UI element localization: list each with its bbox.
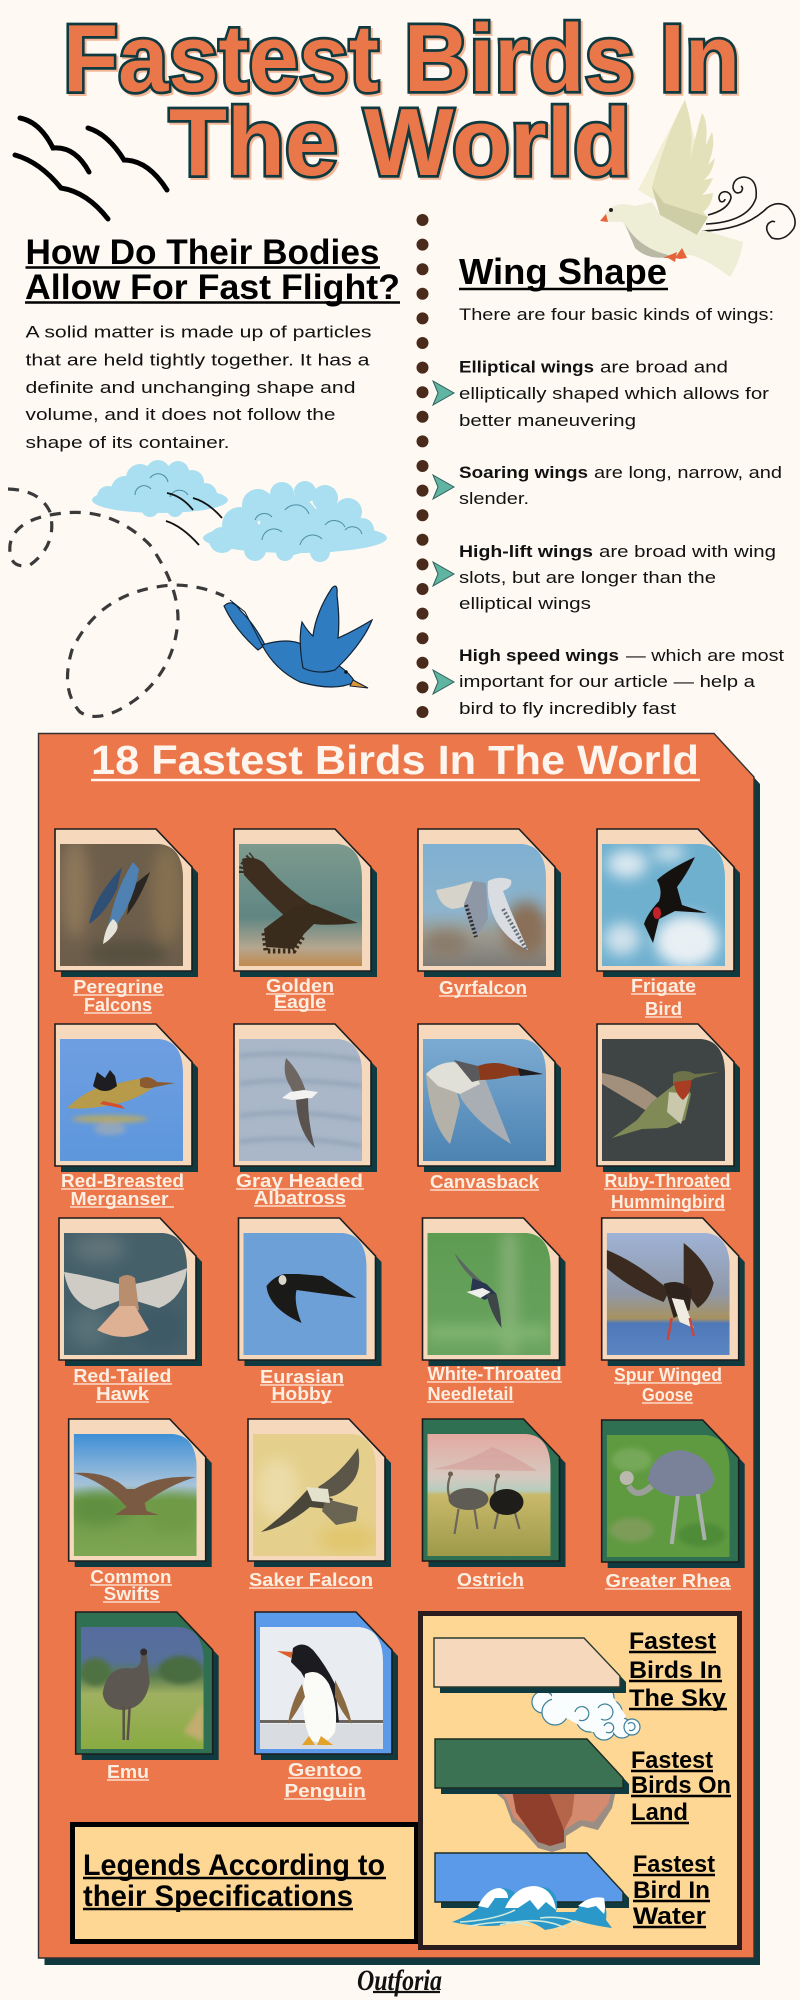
heading: how do their bodies — [25, 233, 400, 307]
label: white-throated needletail: White-Throated — [428, 1364, 562, 1384]
legend text: land: Land — [631, 1799, 688, 1826]
card: white-throated needletail — [422, 1218, 566, 1366]
text block: high speed wings: High speed wings — [459, 646, 619, 665]
panel: legends title: their Specifications — [83, 1880, 353, 1913]
text block: high-lift wings: slots, but are longer than the — [459, 568, 716, 587]
label: red-tailed hawk: Red-Tailed — [73, 1366, 171, 1386]
text block: elliptical wings — [459, 358, 769, 430]
label: gray headed albatross: Albatross — [254, 1188, 346, 1208]
legend text: sky: The Sky — [629, 1685, 727, 1712]
label: red-breasted merganser — [61, 1171, 184, 1209]
label: ruby-throated hummingbird — [604, 1171, 731, 1212]
label: common swifts — [90, 1567, 172, 1604]
legend text: water: Water — [633, 1903, 706, 1930]
text block: solid matter: shape of its container. — [26, 433, 229, 452]
legend text: land — [631, 1747, 731, 1826]
label: peregrine falcons: Peregrine — [73, 977, 163, 997]
title — [63, 5, 740, 196]
text block: soaring wings: Soaring wings — [459, 463, 588, 482]
icon: land rock — [492, 1790, 616, 1852]
card: frigate bird — [597, 829, 740, 977]
card: saker falcon — [248, 1419, 391, 1567]
legend text: land: Birds On — [631, 1772, 731, 1799]
text block: high speed wings: — which are most — [626, 646, 784, 665]
label: frigate bird: Bird — [645, 999, 682, 1019]
text block: elliptical wings: are broad and — [600, 358, 728, 376]
label: white-throated needletail — [427, 1364, 562, 1404]
logo: outforia: Outforia — [357, 1964, 442, 1997]
icon: bird strokes top left — [15, 118, 167, 219]
legend text: water — [633, 1851, 715, 1930]
heading: 18 fastest birds: 18 Fastest Birds In The World — [91, 737, 699, 783]
label: spur winged goose: Spur Winged — [614, 1365, 722, 1385]
text block: soaring wings: slender. — [459, 489, 529, 508]
label: frigate bird: Frigate — [631, 976, 696, 996]
label: common swifts: Swifts — [104, 1584, 160, 1604]
card: golden eagle — [234, 829, 377, 977]
label: golden eagle: Eagle — [274, 992, 326, 1012]
text block: high-lift wings — [459, 542, 776, 613]
legend text: sky: Birds In — [629, 1657, 722, 1684]
label: red-tailed hawk — [73, 1366, 172, 1404]
label: eurasian hobby: Eurasian — [260, 1367, 344, 1387]
title: Fastest Birds In — [63, 5, 740, 112]
label: canvasback: Canvasback — [430, 1172, 540, 1192]
icon: blue bird — [224, 586, 372, 688]
legend text: water: Bird In — [633, 1877, 710, 1904]
text block: high speed wings — [459, 646, 784, 718]
label: golden eagle: Golden — [266, 976, 334, 996]
label: red-breasted merganser: Red-Breasted — [61, 1171, 184, 1191]
text block: soaring wings: are long, narrow, and — [594, 463, 782, 482]
label: gentoo penguin: Gentoo — [288, 1760, 362, 1780]
icon: teal arrow markers — [433, 381, 454, 694]
icon: sky clouds — [532, 1684, 640, 1740]
icon: blue clouds — [92, 460, 387, 562]
card: red-tailed hawk — [59, 1218, 202, 1366]
text block: high speed wings: bird to fly incredibly fast — [459, 699, 676, 718]
legend text: land: Fastest — [631, 1747, 713, 1774]
label: peregrine falcons — [73, 977, 164, 1015]
label: ruby-throated hummingbird: Ruby-Throated — [604, 1171, 730, 1191]
text block: elliptical wings: better maneuvering — [459, 411, 636, 430]
text block: high-lift wings: are broad with wing — [599, 542, 776, 561]
panel: legends title — [72, 1824, 416, 1942]
label: greater rhea: Greater Rhea — [606, 1571, 732, 1591]
label: ostrich: Ostrich — [457, 1570, 524, 1590]
legend text: sky — [629, 1628, 727, 1712]
card: gyrfalcon — [418, 829, 561, 977]
heading: wing shape: Wing Shape — [459, 251, 667, 292]
heading: how do their bodies: Allow For Fast Flight? — [25, 268, 400, 307]
icon: waves — [452, 1886, 612, 1930]
legend swatch: land — [435, 1739, 629, 1794]
card: greater rhea — [602, 1420, 745, 1568]
label: gray headed albatross: Gray Headed — [236, 1171, 363, 1191]
icon: dashed flight path — [8, 489, 224, 716]
text block: soaring wings — [459, 463, 782, 508]
label: common swifts: Common — [90, 1567, 171, 1587]
panel: shadow — [44, 740, 760, 1965]
legend text: water: Fastest — [633, 1851, 715, 1878]
label: saker falcon: Saker Falcon — [249, 1570, 373, 1590]
label: eurasian hobby: Hobby — [272, 1384, 332, 1404]
text block: elliptical wings: elliptically shaped which allows for — [459, 384, 769, 403]
card: canvasback — [418, 1024, 561, 1172]
label: spur winged goose — [614, 1365, 722, 1405]
card: ruby-throated hummingbird — [597, 1024, 740, 1172]
text block: high speed wings: important for our article — help a — [459, 672, 756, 691]
panel: legend — [420, 1614, 740, 1948]
label: ruby-throated hummingbird: Hummingbird — [611, 1192, 725, 1212]
label: emu: Emu — [107, 1762, 149, 1782]
text block: solid matter: definite and unchanging shape and — [26, 378, 356, 397]
text block: four basic kinds: There are four basic kinds of wings: — [459, 305, 774, 324]
label: gentoo penguin: Penguin — [284, 1781, 366, 1801]
card: common swifts — [69, 1419, 212, 1567]
label: gentoo penguin — [284, 1760, 366, 1801]
label: red-tailed hawk: Hawk — [96, 1384, 150, 1404]
legend text: sky: Fastest — [629, 1628, 716, 1655]
text block: solid matter: volume, and it does not follow the — [26, 405, 336, 424]
card: peregrine falcon — [55, 829, 198, 977]
label: frigate bird — [631, 976, 696, 1019]
divider: dotted line — [416, 214, 428, 718]
label: peregrine falcons: Falcons — [84, 995, 152, 1015]
icon: white dove — [600, 100, 795, 277]
label: golden eagle — [266, 976, 334, 1012]
card: ostrich — [422, 1419, 566, 1567]
card: eurasian hobby — [238, 1218, 382, 1366]
title: The World — [169, 89, 631, 196]
text block: elliptical wings: Elliptical wings — [459, 358, 594, 376]
label: red-breasted merganser: Merganser — [70, 1189, 168, 1209]
card: spur winged goose — [602, 1218, 745, 1366]
text block: high-lift wings: High-lift wings — [459, 542, 593, 561]
label: spur winged goose: Goose — [642, 1385, 693, 1405]
text block: solid matter — [26, 322, 372, 452]
card: gentoo penguin — [255, 1612, 398, 1760]
card: gray headed albatross — [234, 1024, 377, 1172]
label: gyrfalcon: Gyrfalcon — [439, 978, 527, 998]
heading: how do their bodies: How Do Their Bodies — [26, 233, 380, 272]
panel: 18 fastest birds — [38, 734, 754, 1958]
legend swatch: sky — [434, 1638, 626, 1693]
label: eurasian hobby — [260, 1367, 344, 1404]
label: white-throated needletail: Needletail — [428, 1384, 514, 1404]
legend swatch: water — [435, 1853, 629, 1908]
card: emu — [76, 1612, 219, 1760]
label: gray headed albatross — [236, 1171, 364, 1208]
text block: solid matter: A solid matter is made up of particles — [26, 322, 372, 342]
panel: legends title: Legends According to — [83, 1849, 385, 1882]
card: red-breasted merganser — [55, 1024, 198, 1172]
text block: high-lift wings: elliptical wings — [459, 594, 591, 613]
text block: solid matter: that are held tightly together. It has a — [26, 350, 370, 370]
